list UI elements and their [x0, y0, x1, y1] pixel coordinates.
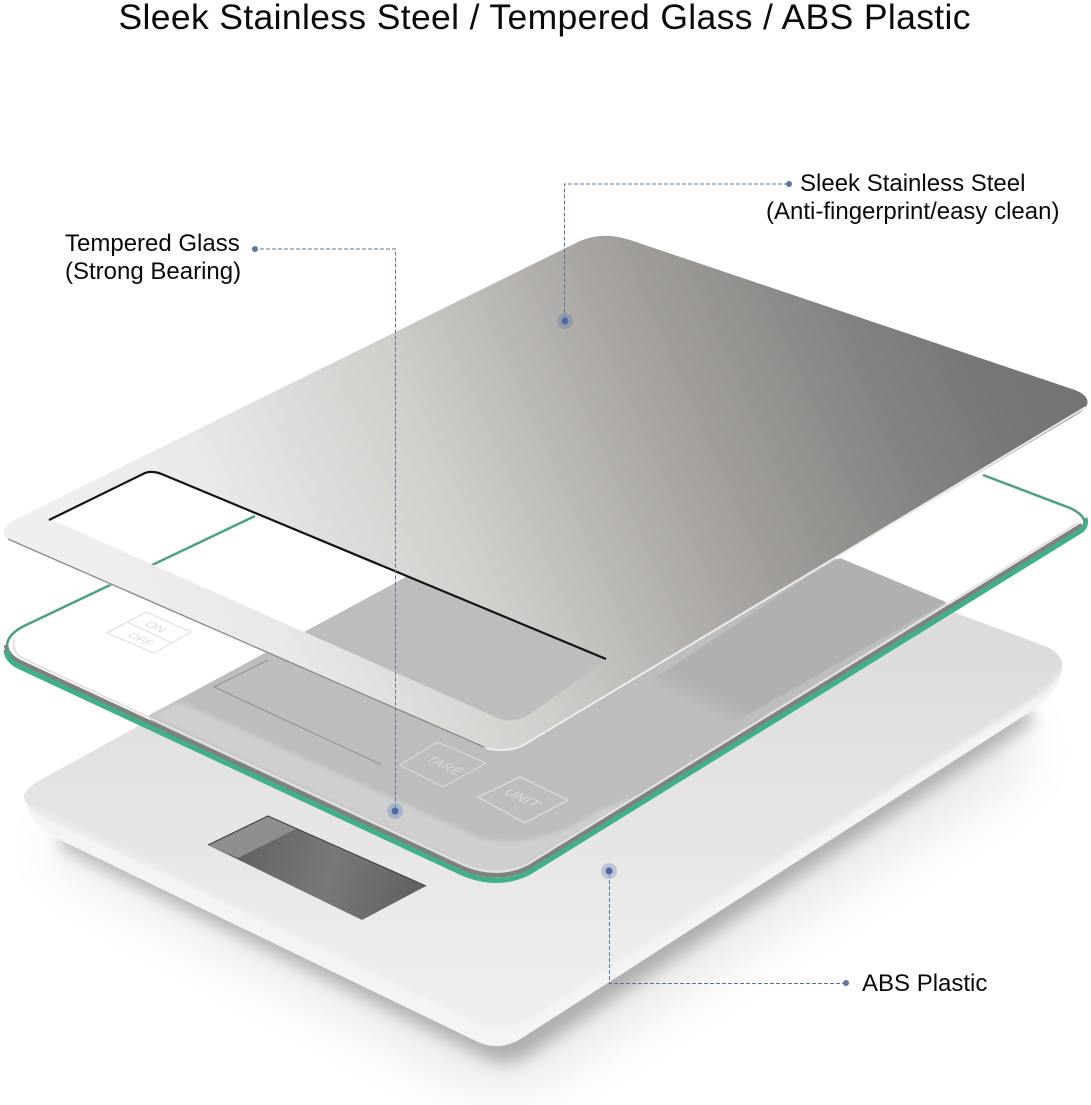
callout: stainless steel	[557, 170, 1059, 329]
button: UNIT: UNIT	[498, 787, 545, 810]
steel lower right highlight	[486, 407, 1086, 750]
callout: ABS plastic	[601, 863, 987, 997]
glass lower edge: dark bevel	[6, 525, 1082, 876]
button: TARE	[400, 742, 486, 787]
callout: stainless steel: Sleek Stainless Steel	[800, 170, 1025, 197]
steel window black inner edge	[49, 472, 606, 659]
display outline	[214, 660, 382, 765]
glass: base seen through	[148, 558, 949, 874]
stainless steel plate	[4, 236, 1088, 750]
callout: tempered glass: (Strong Bearing)	[65, 258, 241, 285]
tempered glass panel	[4, 474, 1088, 883]
glass white body	[10, 360, 1085, 876]
steel plate surface with window cut-out	[4, 236, 1088, 750]
base top surface	[24, 478, 1062, 1025]
button: ON/OFF: OFF	[123, 631, 157, 648]
LCD window	[208, 816, 426, 920]
glass edge lines	[7, 516, 255, 645]
base surface soft lower edge	[30, 674, 1060, 1025]
callout: tempered glass: Tempered Glass	[65, 230, 240, 257]
button: UNIT	[478, 777, 568, 823]
button: ON/OFF	[107, 612, 191, 653]
callout: ABS plastic: ABS Plastic	[862, 970, 987, 997]
base side edge	[26, 665, 1062, 1046]
callout: stainless steel: (Anti-fingerprint/easy clean)	[766, 198, 1059, 225]
button: ON/OFF: ON	[140, 619, 171, 635]
scale base: ABS plastic	[24, 478, 1062, 1090]
glass lower edge: green	[6, 518, 1086, 880]
glass lower edge: bevel highlight	[14, 523, 1078, 872]
button: TARE: TARE	[421, 754, 468, 777]
base shadow	[50, 700, 1035, 1090]
callout: tempered glass	[65, 230, 403, 819]
steel lower left edge	[8, 539, 484, 747]
